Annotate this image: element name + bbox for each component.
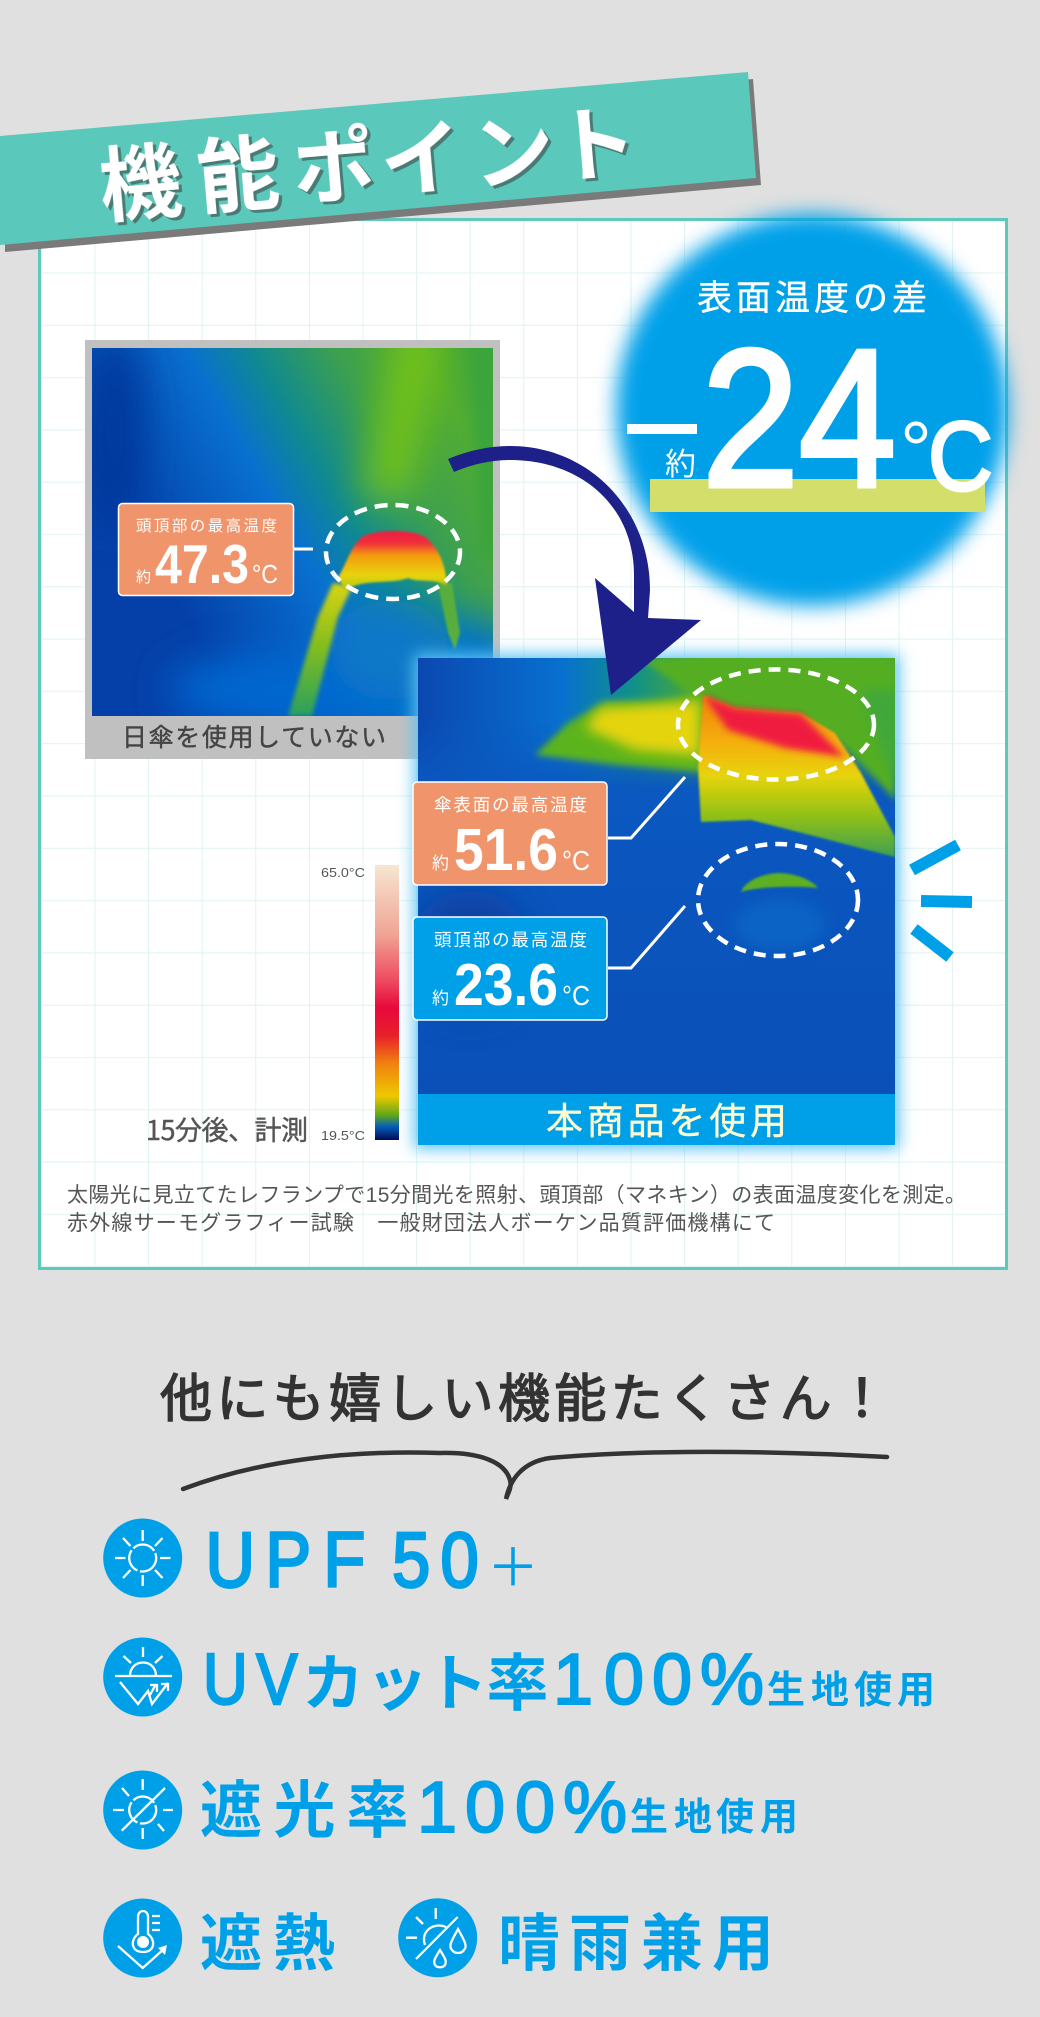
chart: temperature scale: 65.0°C	[321, 865, 365, 880]
callout: head max temperature 47.3: °C	[252, 559, 278, 589]
panel: thermal image without parasol	[85, 330, 520, 759]
callout: temperature difference circle: 表面温度の差	[697, 270, 927, 321]
feature: UV cut rate 100%: カット率	[302, 1633, 549, 1723]
label: no parasol: 日傘を使用していない	[122, 718, 386, 754]
text: test note: 太陽光に見立てたレフランプで15分間光を照射、頭頂部（マネキン）の表面温度変化を測定。	[67, 1184, 966, 1207]
panel: thermal comparison	[40, 214, 1008, 1268]
label: product used	[418, 1091, 895, 1145]
callout: temperature difference circle	[616, 214, 1008, 606]
icon: UV reflect	[103, 1638, 182, 1716]
feature: heat shielding	[103, 1893, 335, 1983]
feature: sun and rain: 晴雨兼用	[498, 1893, 774, 1983]
callout: head max temperature 23.6: °C	[562, 980, 590, 1011]
callout: head max temperature 23.6: 23.6	[454, 952, 558, 1018]
callout: head max temperature 47.3: 頭頂部の最高温度	[136, 514, 277, 536]
feature: light blocking rate 100%	[103, 1760, 798, 1850]
feature: UV cut rate 100%	[103, 1633, 935, 1723]
callout: head max temperature 23.6	[413, 906, 685, 1020]
icon: thermometer	[103, 1898, 182, 1978]
icon: sun	[103, 1518, 182, 1598]
callout: head max temperature 23.6: 頭頂部の最高温度	[434, 927, 587, 952]
panel: thermal image with parasol	[410, 658, 900, 1145]
heading: many other features: 他にも嬉しい機能たくさん！	[160, 1357, 888, 1432]
callout: parasol surface max temperature 51.6	[413, 777, 685, 885]
brace decoration	[183, 1452, 887, 1499]
text: test note: 赤外線サーモグラフィー試験 一般財団法人ボーケン品質評価機構にて	[67, 1212, 775, 1235]
callout: parasol surface max temperature 51.6: °C	[562, 845, 590, 876]
callout: parasol surface max temperature 51.6: 約	[432, 849, 449, 874]
callout: head max temperature 23.6: 約	[432, 984, 449, 1009]
feature: light blocking rate 100%: 遮光率	[200, 1760, 409, 1850]
feature: light blocking rate 100%: 100%	[417, 1768, 627, 1848]
text: measured after 15 minutes: 15分後、計測	[146, 1109, 308, 1148]
dashed ellipse: head	[326, 505, 460, 599]
callout: parasol surface max temperature 51.6: 傘表面の最高温度	[434, 792, 587, 817]
callout: head max temperature 47.3: 47.3	[155, 533, 249, 595]
icon: sun and rain drops	[398, 1898, 477, 1977]
dashed ellipse: head	[698, 844, 858, 956]
feature: UV cut rate 100%: 100%	[553, 1640, 764, 1720]
blurred glow behind product image	[414, 654, 899, 1149]
feature: UPF 50+	[103, 1515, 539, 1603]
callout: temperature difference circle: C	[928, 401, 993, 511]
feature: UV cut rate 100%: 生地使用	[767, 1659, 935, 1714]
feature: UPF 50+: ＋	[487, 1526, 539, 1601]
callout: head max temperature 47.3: 約	[136, 566, 151, 587]
heading banner: function points	[0, 72, 761, 252]
chart: temperature scale	[321, 865, 399, 1143]
callout: head max temperature 47.3	[118, 504, 313, 596]
icon: sun blocked	[103, 1770, 182, 1850]
feature: UPF 50+: UPF 50	[206, 1515, 479, 1603]
heading banner: function points: 機能ポイント	[94, 75, 641, 240]
callout: parasol surface max temperature 51.6: 51.6	[454, 817, 558, 883]
callout: temperature difference circle: °	[900, 405, 932, 494]
feature: heat shielding: 遮熱	[200, 1893, 335, 1983]
arrow: before to after	[448, 446, 701, 695]
feature: UV cut rate 100%: UV	[203, 1640, 298, 1720]
icon: emphasis ticks	[912, 845, 972, 957]
label: product used: 本商品を使用	[546, 1091, 787, 1145]
text: test note	[67, 1184, 966, 1235]
feature: light blocking rate 100%: 生地使用	[630, 1786, 798, 1841]
dashed ellipse: parasol surface	[678, 670, 874, 780]
chart: temperature scale: 19.5°C	[321, 1128, 365, 1143]
callout: temperature difference circle: 24	[702, 309, 896, 528]
callout: temperature difference circle: 約	[665, 439, 696, 484]
